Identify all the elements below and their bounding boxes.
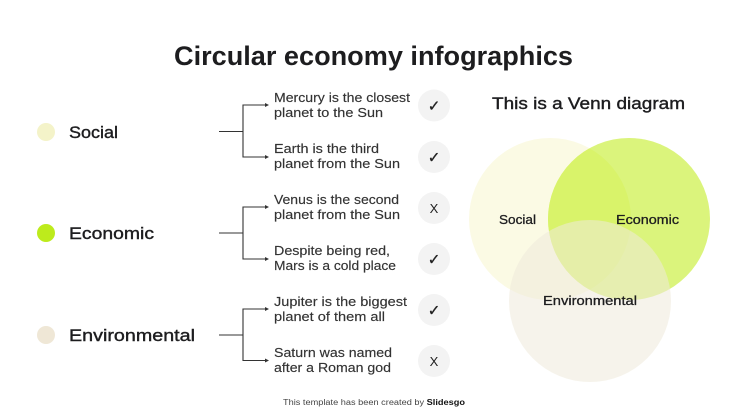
text: Jupiter: Jupiter is the biggest xyxy=(274,294,407,309)
icon: cross 2 xyxy=(418,345,450,377)
text: Saturn xyxy=(274,345,392,375)
text: Mars: Despite being red, xyxy=(274,243,390,258)
icon: cross 2: X xyxy=(430,354,439,369)
icon: cross 1: X xyxy=(430,201,439,216)
legend: environmental: Environmental xyxy=(69,326,195,345)
venn circle: economic xyxy=(548,138,710,300)
venn circle: social xyxy=(469,138,631,300)
title: Circular economy infographics xyxy=(174,41,573,71)
venn label: environmental: Environmental xyxy=(543,293,637,308)
icon: check 4: ✓ xyxy=(428,302,440,320)
arrow bracket: social xyxy=(219,103,269,159)
text: Mars xyxy=(274,243,396,273)
legend: economic xyxy=(37,224,155,243)
icon: check 1 xyxy=(418,90,450,122)
legend: social: Social xyxy=(69,123,118,142)
text: Earth xyxy=(274,141,400,171)
icon: check 2 xyxy=(418,141,450,173)
text: Jupiter xyxy=(274,294,407,324)
text: Mercury xyxy=(274,90,410,120)
legend: social xyxy=(37,123,118,142)
icon: check 4 xyxy=(418,294,450,326)
text: Jupiter: planet of them all xyxy=(274,309,385,324)
arrow bracket: environmental xyxy=(219,307,269,362)
icon: check 3: ✓ xyxy=(428,252,440,268)
icon: check 1: ✓ xyxy=(428,98,440,115)
text: Venus xyxy=(274,192,400,222)
text: Earth: Earth is the third xyxy=(274,141,379,156)
icon: check 3 xyxy=(418,243,450,275)
text: Mars: Mars is a cold place xyxy=(274,258,396,273)
venn label: economic: Economic xyxy=(616,212,680,227)
legend: economic: Economic xyxy=(69,224,155,243)
legend: environmental xyxy=(37,326,195,345)
text: Saturn: after a Roman god xyxy=(274,360,391,375)
icon: cross 1 xyxy=(418,192,450,224)
footer credit: This template has been created by Slidesgo xyxy=(283,398,465,407)
venn overlap: social and economic xyxy=(548,148,631,290)
text: Venus: Venus is the second xyxy=(274,192,399,207)
text: Saturn: Saturn was named xyxy=(274,345,392,360)
text: Earth: planet from the Sun xyxy=(274,156,400,171)
icon: check 2: ✓ xyxy=(428,150,440,166)
venn heading: This is a Venn diagram xyxy=(492,94,685,113)
arrow bracket: economic xyxy=(219,205,269,261)
text: Venus: planet from the Sun xyxy=(274,207,400,222)
venn circle: environmental xyxy=(509,220,671,382)
venn diagram xyxy=(469,138,710,382)
text: Mercury: planet to the Sun xyxy=(274,105,383,120)
text: Mercury: Mercury is the closest xyxy=(274,90,410,105)
venn label: social: Social xyxy=(499,212,536,227)
